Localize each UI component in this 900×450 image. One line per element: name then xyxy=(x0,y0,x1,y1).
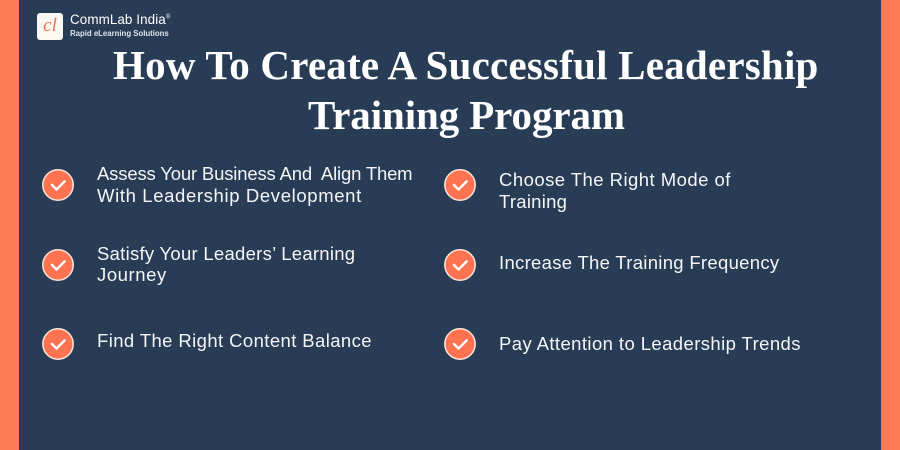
item text: Find The Right Content Balance xyxy=(97,330,372,351)
logo mark xyxy=(37,13,63,40)
icon: check xyxy=(42,169,74,201)
item text: Satisfy Your Leaders’ Learning xyxy=(97,243,355,264)
item text: Journey xyxy=(97,264,167,285)
left orange band xyxy=(0,0,19,450)
item: content balance xyxy=(42,328,372,360)
logo name: CommLab India® xyxy=(70,12,170,27)
icon: check xyxy=(42,249,74,281)
title line 1: How To Create A Successful Leadership xyxy=(113,42,819,88)
item text: Increase The Training Frequency xyxy=(499,252,779,273)
item text xyxy=(97,163,412,206)
title line 2: Training Program xyxy=(308,92,625,138)
item: assess business xyxy=(42,163,412,206)
logo: CommLab India xyxy=(37,12,170,40)
icon: check xyxy=(444,249,476,281)
right orange band xyxy=(881,0,900,450)
logo mark: cl xyxy=(43,15,57,36)
item text: Pay Attention to Leadership Trends xyxy=(499,333,801,354)
item: mode of training xyxy=(444,169,731,212)
icon: check xyxy=(444,328,476,360)
item: training frequency xyxy=(444,249,780,281)
item text: Assess Your Business And Align Them xyxy=(97,163,412,184)
icon: check xyxy=(42,328,74,360)
item text: With Leadership Development xyxy=(97,185,362,206)
title xyxy=(113,42,819,138)
item text: Training xyxy=(499,191,567,212)
logo tagline: Rapid eLearning Solutions xyxy=(70,29,169,38)
item: leaders journey xyxy=(42,243,355,285)
icon: check xyxy=(444,169,476,201)
item: leadership trends xyxy=(444,328,801,360)
item text xyxy=(499,169,731,212)
item text: Choose The Right Mode of xyxy=(499,169,731,190)
item text xyxy=(97,243,355,285)
